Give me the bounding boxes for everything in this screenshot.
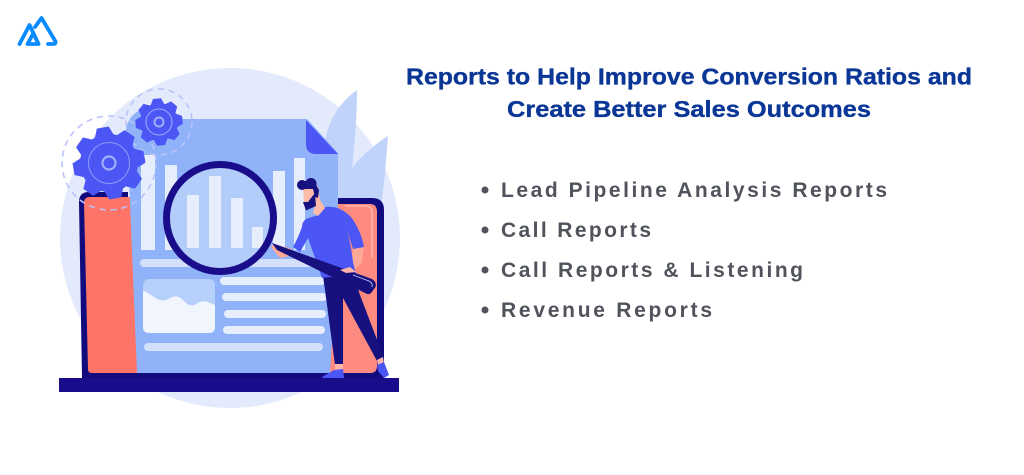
large gear (72, 126, 146, 200)
handle highlight (353, 275, 372, 287)
illustration: report analysis (59, 68, 400, 408)
background circle (60, 68, 400, 408)
leaves (324, 90, 388, 250)
title: Reports to Help Improve Conversion Ratios and (406, 64, 972, 90)
right forearm (342, 247, 364, 272)
bars inside lens (187, 176, 263, 248)
document text lines (220, 277, 327, 334)
list item: revenue reports: Revenue Reports (501, 299, 712, 322)
laptop screen: left pink panel (84, 197, 140, 373)
magnifying glass lens (167, 165, 273, 271)
laptop base (59, 378, 399, 392)
list item: lead pipeline: Lead Pipeline Analysis Reports (501, 179, 887, 202)
hand on handle (340, 267, 356, 273)
list item: call reports and listening: Call Reports & Listening (501, 259, 803, 282)
laptop screen: right pink panel (325, 204, 377, 373)
bar chart on document (141, 155, 305, 250)
left hand (271, 244, 292, 258)
hair (297, 178, 319, 198)
blue blob behind small gear (126, 108, 174, 156)
dashed orbit rings (62, 89, 192, 210)
title: Create Better Sales Outcomes (507, 96, 871, 122)
beard (303, 193, 316, 210)
torso and arms (293, 207, 364, 278)
ankles (335, 357, 384, 371)
laptop frame (79, 192, 384, 378)
small gear (135, 98, 183, 146)
person (271, 178, 389, 378)
document page fold (306, 120, 338, 154)
neck and face (303, 186, 325, 216)
legs (323, 276, 384, 365)
area chart card (143, 279, 215, 333)
magnifying glass ring (166, 164, 274, 272)
title (406, 64, 972, 122)
lower document lines (140, 259, 328, 351)
icon: company logo (20, 18, 56, 44)
shoes (322, 362, 389, 378)
magnifier handle (272, 243, 376, 294)
pink panel highlight (345, 206, 372, 258)
bullet list (482, 179, 887, 322)
report document (127, 119, 338, 373)
list item: call reports: Call Reports (501, 219, 651, 242)
